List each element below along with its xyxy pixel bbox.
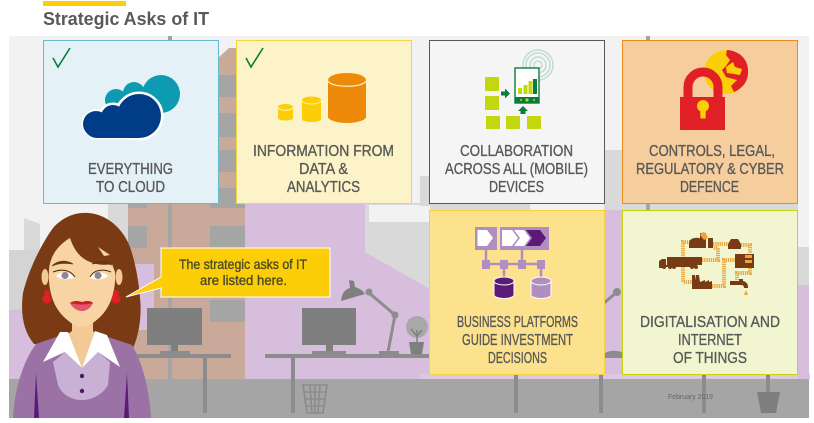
- panel: digitalisation and internet of things: [622, 210, 798, 374]
- heading: controls: REGULATORY & CYBER: [636, 161, 784, 178]
- heading: everything to cloud: EVERYTHING: [88, 161, 173, 178]
- heading: controls: DEFENCE: [680, 179, 739, 196]
- heading: business platforms: BUSINESS PLATFORMS: [457, 314, 578, 331]
- sweater seam right: [124, 373, 129, 418]
- lips: [70, 301, 93, 311]
- panel: business platforms: [430, 210, 604, 374]
- heading: information from data: [253, 143, 394, 196]
- eyes: [53, 270, 111, 279]
- icon: mobile collaboration: [485, 50, 553, 129]
- icon: business platform process: [475, 227, 551, 298]
- face: [49, 238, 115, 327]
- panel: information from data: [236, 40, 412, 204]
- heading: collaboration: COLLABORATION: [460, 143, 573, 160]
- waste bin: [303, 385, 327, 413]
- heading: digitalisation: INTERNET: [678, 332, 742, 349]
- collar right: [82, 331, 120, 368]
- heading: digitalisation: OF THINGS: [673, 350, 747, 367]
- heading: everything to cloud: [88, 161, 173, 196]
- title: Strategic Asks of IT: [43, 9, 209, 29]
- desk plant: [406, 316, 428, 354]
- sweater seam left: [34, 373, 39, 418]
- panel: collaboration: [430, 40, 604, 204]
- panel: controls, legal, regulatory and cyber defence: [622, 40, 798, 204]
- sweater: [13, 335, 151, 418]
- heading: controls: CONTROLS, LEGAL,: [649, 143, 775, 160]
- desks, monitors and office furniture: [135, 288, 780, 413]
- hair highlight: [98, 247, 110, 256]
- heading: collaboration: [445, 143, 588, 196]
- character: presenter woman: [13, 213, 151, 418]
- heading: collaboration: DEVICES: [489, 179, 544, 196]
- heading: business platforms: DECISIONS: [488, 350, 547, 367]
- heading: business platforms: [457, 314, 578, 367]
- callout: [126, 248, 330, 297]
- heading: digitalisation: [640, 314, 780, 367]
- icon: check mark cloud: [53, 48, 70, 67]
- neck: [68, 318, 96, 368]
- heading: information from data: DATA &: [299, 161, 348, 178]
- heading: collaboration: ACROSS ALL (MOBILE): [445, 161, 588, 178]
- heading: information from data: ANALYTICS: [287, 179, 360, 196]
- icon: check mark data: [246, 48, 263, 67]
- ears: [42, 269, 122, 285]
- heading: controls: [636, 143, 784, 196]
- heading: information from data: INFORMATION FROM: [253, 143, 394, 160]
- callout: The strategic asks of IT: [179, 256, 307, 272]
- callout: are listed here.: [200, 272, 287, 288]
- heading: digitalisation: DIGITALISATION AND: [640, 314, 780, 331]
- icon: clouds: [83, 75, 180, 139]
- collar left: [43, 332, 82, 368]
- earrings: [42, 290, 120, 304]
- inner blouse: [53, 352, 110, 400]
- icon: padlock and globe: [680, 50, 748, 130]
- date label: February 2019: [668, 392, 713, 401]
- panel: everything to cloud: [44, 40, 218, 204]
- heading: everything to cloud: TO CLOUD: [96, 179, 165, 196]
- icon: databases: [278, 73, 366, 123]
- desk lamp: [341, 280, 399, 354]
- icon: connected industry: [659, 232, 754, 295]
- title accent bar: [43, 1, 126, 6]
- heading: business platforms: GUIDE INVESTMENT: [462, 332, 573, 349]
- buttons: [80, 374, 84, 393]
- eyebrows: [52, 261, 112, 266]
- hair back: [22, 213, 141, 348]
